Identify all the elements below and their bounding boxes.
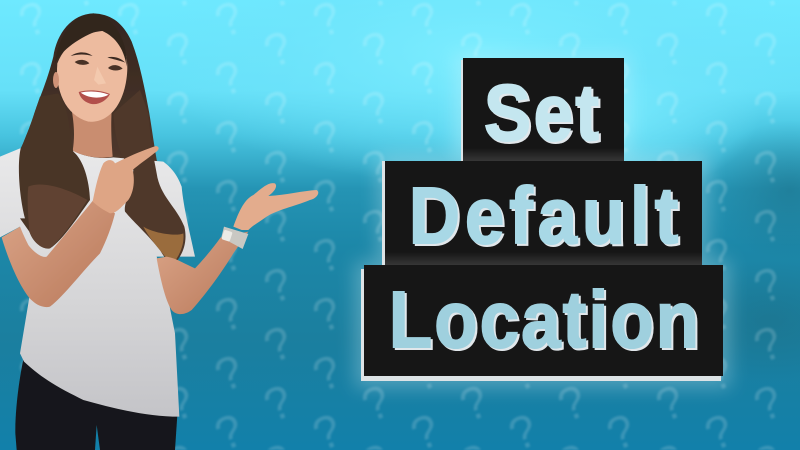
eyebrows: [71, 52, 125, 63]
box: Location: Location: [389, 275, 701, 364]
open hand: [233, 183, 318, 230]
box: Default: Default: [409, 171, 683, 260]
eyes: [75, 60, 123, 70]
box: Location: [364, 265, 723, 376]
hair over shoulders: [19, 93, 90, 249]
nose: [94, 67, 106, 85]
box: Default: Default: [411, 173, 685, 262]
back hair: [19, 13, 185, 265]
box: Location: Location: [391, 277, 703, 366]
pointing hand: [93, 146, 159, 213]
box: Set: Set: [486, 70, 603, 159]
woman pointing at the title: [0, 13, 318, 450]
pointing arm: [2, 200, 115, 307]
shirt: [0, 148, 195, 417]
glow behind title: [355, 55, 730, 388]
box: Set: Set: [484, 68, 601, 157]
box: Set: [463, 58, 624, 161]
pants: [15, 359, 177, 450]
neck: [72, 110, 113, 158]
title block: [355, 55, 730, 388]
face: [57, 31, 127, 122]
smile: [79, 90, 110, 104]
open arm: [157, 232, 248, 314]
watch: [221, 227, 248, 249]
offset light backing: [361, 60, 721, 381]
